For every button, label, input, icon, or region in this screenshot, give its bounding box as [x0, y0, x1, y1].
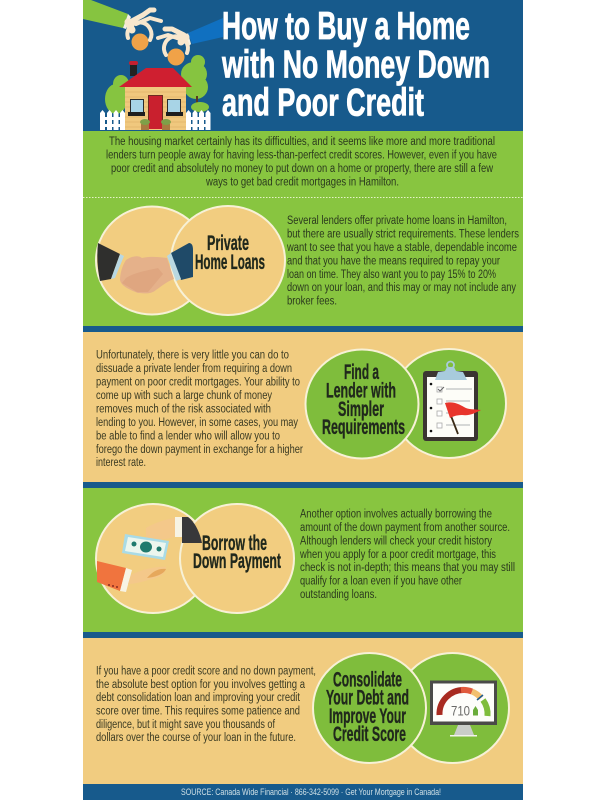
private home loans circle: [171, 206, 285, 315]
icon: credit score monitor circle: [396, 653, 509, 763]
intro text: ways to get bad credit mortgages in Hamilton.: [205, 176, 399, 188]
intro text: lenders turn people away for having less-than-perfect credit scores. However, even if you have: [106, 150, 497, 162]
body text: [96, 350, 303, 469]
body text: outstanding loans.: [300, 589, 377, 601]
body text: but there are usually strict requirements. These lenders: [287, 228, 519, 240]
body text: interest rate.: [96, 457, 146, 469]
title: and Poor Credit: [222, 82, 424, 124]
icon: hands dropping coins: [83, 0, 223, 66]
body text: qualify for a loan even if you have other: [300, 576, 462, 588]
icon: shaking hands: [120, 243, 193, 293]
body text: diligence, but it might save you thousands of: [96, 719, 276, 731]
heading: Improve Your: [329, 705, 406, 728]
title: How to Buy a Home: [222, 5, 470, 48]
footer: [83, 784, 523, 800]
body text: come up with such a large chunk of money: [96, 390, 272, 402]
body text: when you apply for a poor credit mortgage, this: [299, 549, 496, 561]
body text: payment on poor credit mortgages. Your ability to: [96, 376, 300, 388]
body text: debt consolidation loan and improving your credit: [96, 692, 301, 704]
body text: forego the down payment in exchange for a higher: [96, 444, 303, 456]
panel: private home loans: [96, 206, 519, 315]
heading: Private: [207, 232, 249, 255]
heading: [322, 361, 405, 439]
footer: SOURCE: Canada Wide Financial · 866-342-5099 · Get Your Mortgage in Canada!: [181, 787, 441, 798]
body text: amount of the down payment from another source.: [300, 522, 510, 534]
icon: dark cuff: [182, 517, 202, 543]
heading: Find a: [344, 361, 379, 384]
body text: be able to find a lender who will allow you to: [96, 430, 280, 442]
body text: broker fees.: [287, 296, 337, 308]
heading: Down Payment: [193, 550, 281, 573]
intro text: poor credit and absolutely no money to put down on a home or property, there are still a few: [111, 163, 494, 175]
body text: want to see that you have a stable, dependable income: [286, 242, 517, 254]
body text: [96, 666, 316, 744]
body text: If you have a poor credit score and no down payment,: [96, 666, 316, 678]
body text: removes much of the risk associated with: [96, 404, 271, 416]
heading: Credit Score: [333, 723, 406, 746]
intro text: The housing market certainly has its difficulties, and it seems like more and more traditional: [109, 136, 495, 148]
heading: [195, 232, 265, 274]
panel: intro and private home loans background: [83, 131, 523, 326]
icon: house with trees and fence: [100, 55, 210, 130]
heading: Your Debt and: [326, 686, 409, 710]
body text: loan on time. They also want you to pay 15% to 20%: [287, 269, 496, 281]
body text: Unfortunately, there is very little you can do to: [96, 350, 289, 362]
icon: hands passing money circle: [96, 504, 210, 613]
body text: Another option involves actually borrowing the: [300, 508, 492, 520]
body text: score over time. This requires some patience and: [96, 706, 300, 718]
panel: header: [83, 0, 523, 131]
heading: Lender with: [326, 380, 396, 402]
heading: [193, 532, 281, 573]
body text: check is not in-depth; this means that you may still: [300, 562, 515, 574]
body text: the absolute best option for you involves getting a: [96, 679, 305, 691]
icon: credit score monitor circle: 710: [451, 702, 470, 718]
panel: borrow the down payment: [83, 488, 523, 632]
heading: Consolidate: [333, 668, 402, 692]
heading: [326, 668, 409, 746]
body text: dissuade a private lender from requiring a down: [96, 363, 292, 375]
heading: Home Loans: [195, 251, 265, 274]
panel: find a lender: [83, 332, 523, 482]
find a lender circle: [306, 350, 418, 458]
heading: Simpler: [338, 398, 384, 421]
body text: down on your loan, and this may or may not include any: [287, 282, 516, 294]
heading: Requirements: [322, 416, 405, 439]
title: [221, 5, 490, 124]
panel: consolidate your debt: [83, 638, 523, 784]
title: with No Money Down: [221, 44, 490, 86]
heading: Borrow the: [202, 532, 267, 555]
icon: handshake circle: [96, 206, 208, 314]
body text: Although lenders will check your credit history: [300, 536, 492, 548]
body text: [299, 508, 515, 601]
borrow circle: [180, 504, 294, 613]
intro text: [106, 136, 497, 188]
body text: and that you have the means required to repay your: [287, 256, 500, 268]
consolidate circle: [313, 653, 426, 763]
body text: Several lenders offer private home loans in Hamilton,: [287, 215, 507, 227]
body text: lending to you. However, in some cases, you may: [96, 417, 298, 429]
icon: clipboard circle: [392, 349, 506, 458]
body text: dollars over the course of your loan in the future.: [96, 732, 296, 744]
body text: [286, 215, 519, 308]
